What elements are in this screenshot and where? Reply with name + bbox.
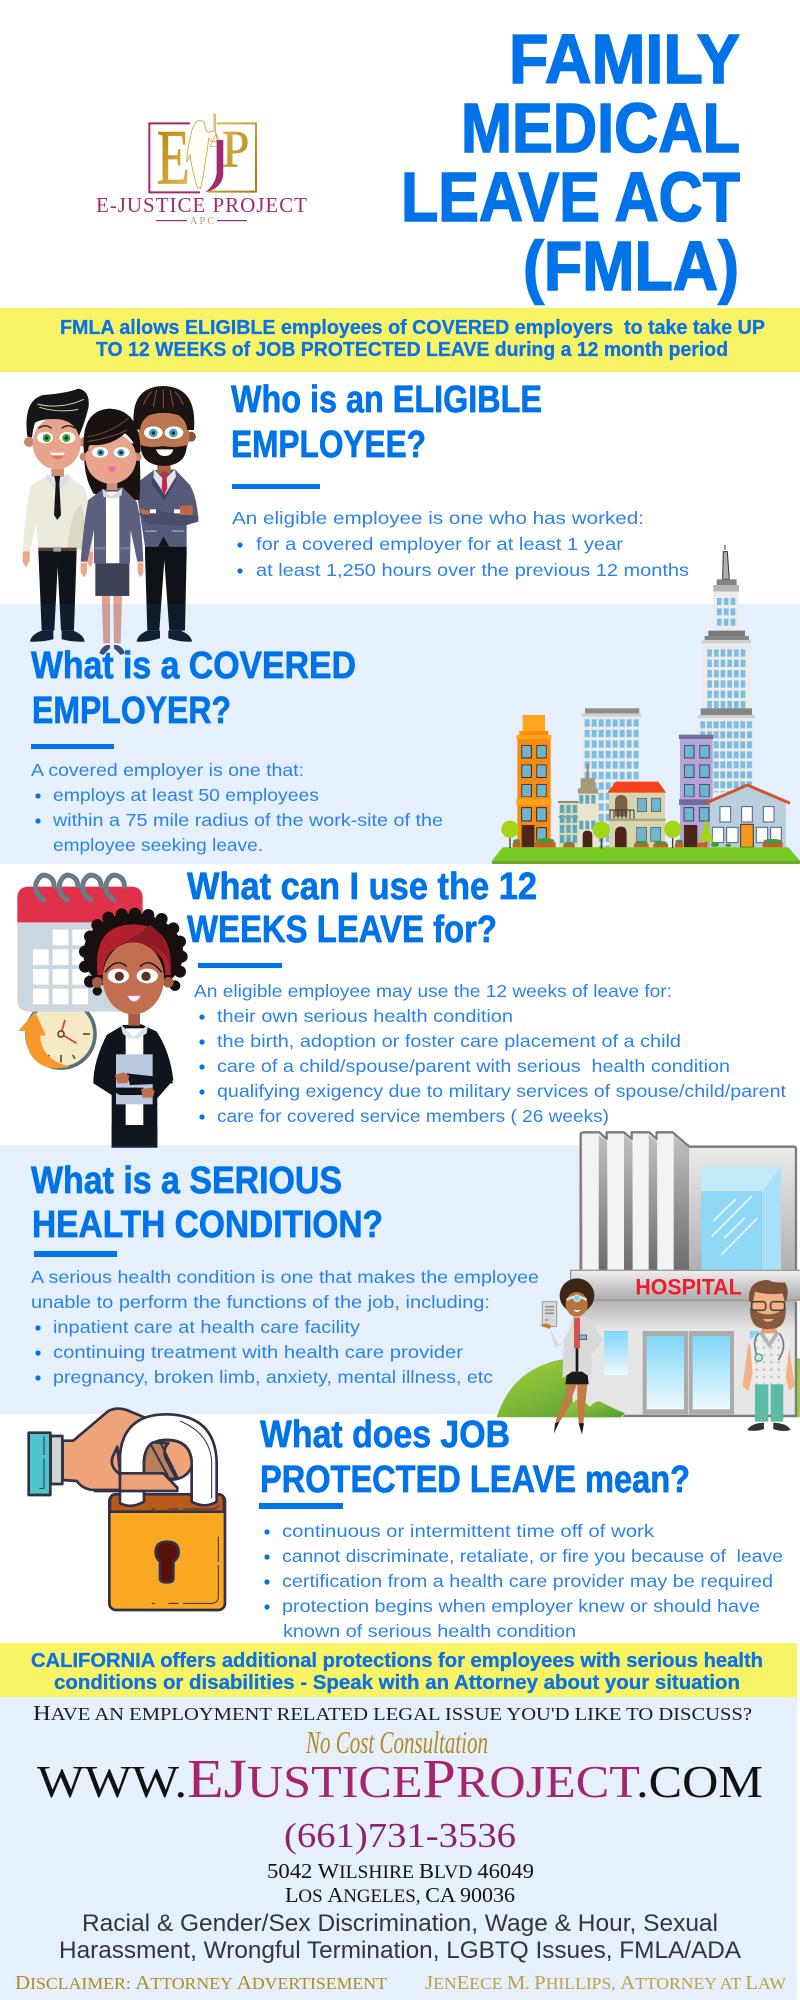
illustration: city buildings — [492, 545, 800, 864]
calendar — [17, 875, 143, 1012]
body text: An eligible employee is one who has worked: — [232, 508, 644, 528]
heading: Who is an ELIGIBLE — [231, 379, 542, 421]
left man — [23, 389, 93, 642]
panel: what is a serious health condition — [0, 1132, 800, 1434]
panel: what is a covered employer — [0, 545, 800, 864]
heading — [31, 645, 356, 732]
body text: qualifying exigency due to military services of spouse/child/parent — [217, 1081, 786, 1101]
body text: care of a child/spouse/parent with serious health condition — [217, 1056, 730, 1076]
body text — [31, 760, 443, 855]
female doctor — [540, 1278, 603, 1434]
skyscraper — [698, 545, 755, 805]
cuff — [29, 1433, 62, 1495]
practice areas: Harassment, Wrongful Termination, LGBTQ Issues, FMLA/ADA — [59, 1937, 741, 1964]
padlock body — [109, 1494, 225, 1610]
heading: HEALTH CONDITION? — [32, 1204, 383, 1246]
disclaimer: DISCLAIMER: ATTORNEY ADVERTISEMENT — [15, 1972, 388, 1994]
orange building — [516, 715, 551, 847]
ground — [492, 847, 800, 864]
right man — [133, 386, 198, 642]
heading — [31, 1160, 383, 1246]
body text — [264, 1521, 783, 1641]
body text — [232, 508, 689, 580]
blue house — [706, 785, 790, 847]
practice areas: Racial & Gender/Sex Discrimination, Wage & Hour, Sexual — [82, 1910, 718, 1937]
body text: protection begins when employer knew or should have — [282, 1596, 760, 1616]
practice areas — [59, 1910, 741, 1964]
website: WWW.EJUSTICE PROJECT .COM — [37, 1748, 763, 1809]
illustration: hospital with doctors — [497, 1132, 800, 1434]
illustration: calendar, clock and woman — [17, 875, 188, 1148]
body text: inpatient care at health care facility — [53, 1317, 360, 1337]
body text: certification from a health care provider may be required — [282, 1571, 773, 1591]
body text: continuing treatment with health care provider — [53, 1342, 463, 1362]
body text: continuous or intermittent time off of work — [282, 1521, 654, 1541]
body text: care for covered service members ( 26 weeks) — [217, 1106, 609, 1126]
woman — [80, 409, 143, 655]
palm inside shackle — [144, 1440, 192, 1480]
panel: contact footer — [0, 1697, 797, 2000]
banner: FMLA summary: FMLA allows ELIGIBLE employees of COVERED employers to take take UP — [60, 316, 765, 339]
body text: An eligible employee may use the 12 weeks of leave for: — [194, 981, 672, 1001]
address: 5042 WILSHIRE BLVD 46049 — [267, 1859, 534, 1883]
body text: within a 75 mile radius of the work-site of the — [52, 810, 443, 830]
body text: A covered employer is one that: — [31, 760, 304, 780]
heading: What is a COVERED — [31, 645, 356, 687]
banner: California protections: CALIFORNIA offers additional protections for employees with serious health — [31, 1649, 763, 1672]
body text: employee seeking leave. — [53, 835, 263, 855]
heading: WEEKS LEAVE for? — [187, 909, 497, 951]
attorney name: JENEECE M. PHILLIPS, ATTORNEY AT LAW — [425, 1972, 787, 1994]
hospital building — [563, 1132, 800, 1417]
address — [267, 1859, 534, 1907]
body text: cannot discriminate, retaliate, or fire you because of leave — [282, 1546, 783, 1566]
panel: what can I use the 12 weeks leave for — [0, 864, 800, 1148]
logo frame: P — [222, 118, 249, 178]
logo frame: E — [157, 114, 190, 201]
green hills — [497, 1358, 800, 1417]
heading: EMPLOYER? — [32, 690, 231, 732]
illustration: hand holding padlock — [29, 1409, 225, 1610]
heading: What can I use the 12 — [187, 866, 537, 908]
trees and planters — [501, 819, 783, 849]
heading: What is a SERIOUS — [31, 1160, 342, 1202]
banner: California protections — [0, 1643, 797, 1697]
heading — [231, 379, 542, 466]
woman with folder — [79, 908, 188, 1148]
title: FAMILY — [509, 20, 740, 98]
panel: who is an eligible employee — [0, 372, 800, 655]
heading: PROTECTED LEAVE mean? — [260, 1459, 690, 1501]
office tower — [582, 708, 641, 847]
title: LEAVE ACT — [401, 158, 740, 236]
heading: EMPLOYEE? — [231, 424, 426, 466]
body text: pregnancy, broken limb, anxiety, mental illness, etc — [53, 1367, 493, 1387]
body text: employs at least 50 employees — [53, 785, 319, 805]
body text: at least 1,250 hours over the previous 12 months — [256, 560, 689, 580]
body text — [194, 981, 786, 1126]
title: (FMLA) — [523, 227, 739, 305]
small beige building — [558, 764, 598, 847]
body text: unable to perform the functions of the job, including: — [31, 1292, 490, 1312]
body text — [31, 1267, 539, 1387]
logo frame — [149, 114, 256, 201]
body text: for a covered employer for at least 1 year — [256, 534, 623, 554]
consultation question: HAVE AN EMPLOYMENT RELATED LEGAL ISSUE YOU'D LIKE TO DISCUSS? — [33, 1701, 752, 1725]
header: logo — [96, 114, 307, 227]
body text: A serious health condition is one that makes the employee — [31, 1267, 539, 1287]
heading: What does JOB — [260, 1414, 510, 1456]
shackle — [120, 1414, 217, 1506]
hand — [63, 1409, 148, 1490]
logo subtitle — [156, 216, 247, 227]
body text: the birth, adoption or foster care placement of a child — [217, 1031, 681, 1051]
no cost consultation: No Cost Consultation — [305, 1724, 488, 1760]
address: LOS ANGELES, CA 90036 — [285, 1883, 515, 1907]
body text: their own serious health condition — [217, 1006, 513, 1026]
panel: what does job protected leave mean — [0, 1409, 800, 1643]
logo subtitle: APC — [190, 216, 214, 227]
heading — [187, 866, 537, 951]
title — [401, 20, 740, 305]
red roof building — [607, 782, 666, 847]
fingers — [95, 1447, 177, 1491]
banner: FMLA summary — [0, 308, 800, 372]
body text: known of serious health condition — [283, 1621, 576, 1641]
male doctor — [743, 1280, 795, 1431]
purple building — [679, 735, 713, 847]
heading — [260, 1414, 690, 1501]
title: MEDICAL — [461, 89, 740, 167]
clock — [18, 1000, 95, 1068]
phone number: (661)731-3536 — [284, 1816, 516, 1855]
illustration: three employees — [23, 386, 198, 655]
logo wordmark: E-JUSTICE PROJECT — [96, 193, 307, 217]
banner: California protections: conditions or disabilities - Speak with an Attorney about your situation — [54, 1671, 740, 1694]
banner: FMLA summary: TO 12 WEEKS of JOB PROTECTED LEAVE during a 12 month period — [96, 338, 728, 361]
hospital sign: HOSPITAL — [635, 1274, 742, 1299]
